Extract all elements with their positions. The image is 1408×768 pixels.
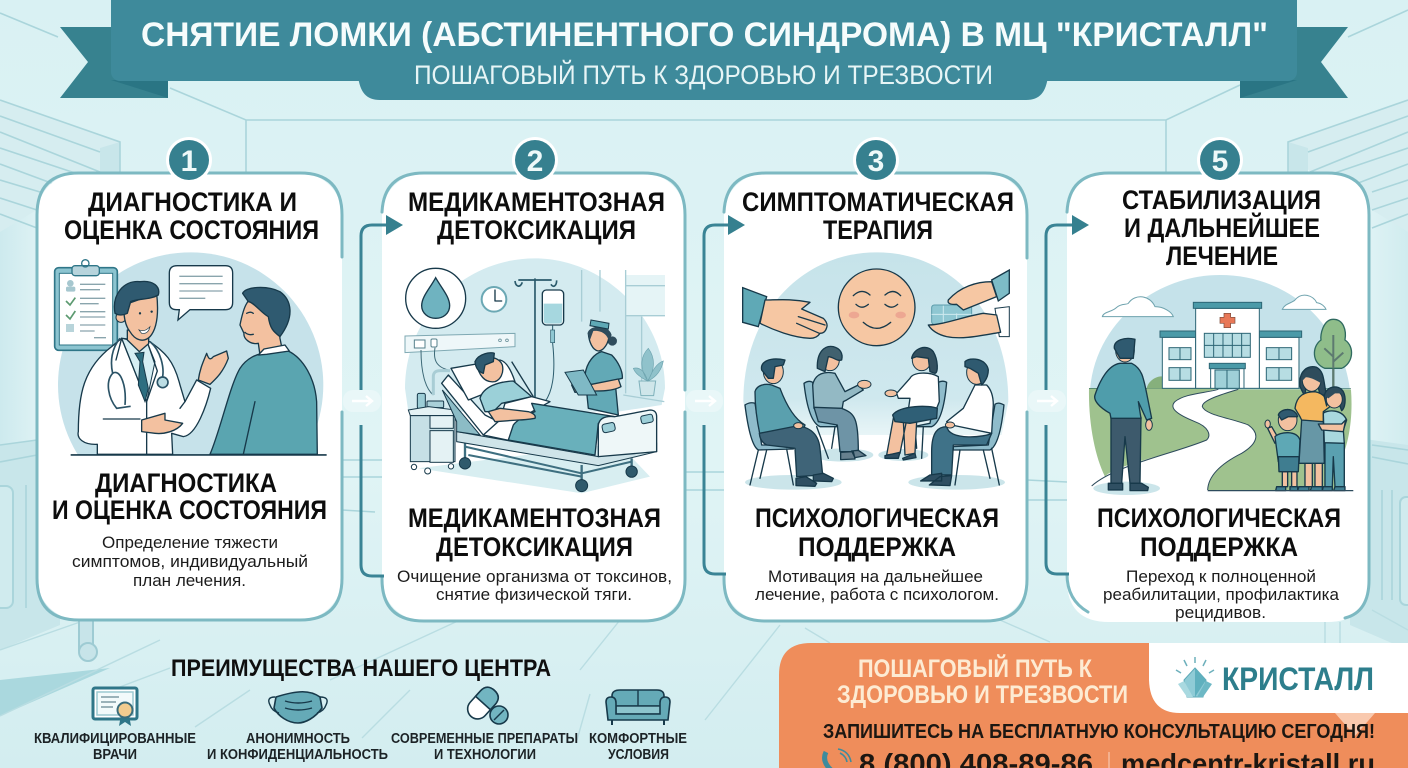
icon: crystal logo (1176, 657, 1214, 697)
IV drip (515, 278, 564, 402)
label: doctors: КВАЛИФИЦИРОВАННЫЕ (34, 731, 196, 747)
description: Очищение организма от токсинов, (397, 567, 672, 586)
icon: sofa (606, 690, 670, 725)
heading top (64, 187, 319, 245)
description: Переход к полноценной (1126, 567, 1316, 586)
label: anonymity: АНОНИМНОСТЬ (246, 731, 350, 747)
description: реабилитации, профилактика (1103, 585, 1340, 604)
CTA heading (837, 653, 1128, 709)
step number 2 (512, 137, 558, 183)
patient (210, 287, 317, 454)
label: anonymity (207, 731, 388, 763)
heading bottom (408, 503, 661, 562)
label: doctors (34, 731, 196, 763)
group person 4 (921, 359, 1004, 486)
clouds (1102, 295, 1326, 317)
illustration: hospital and family (1089, 275, 1353, 495)
family (1265, 367, 1347, 491)
group person 3 (885, 347, 947, 460)
heading bottom (1097, 503, 1341, 562)
heading top: МЕДИКАМЕНТОЗНАЯ (408, 187, 665, 217)
bedside table (408, 393, 456, 474)
label: modern drugs (391, 731, 578, 763)
water drop badge (406, 268, 466, 328)
panel: call to action (779, 643, 1408, 768)
heading bottom: МЕДИКАМЕНТОЗНАЯ (408, 503, 661, 533)
step number 1 (166, 137, 212, 183)
step number 5 (1197, 137, 1243, 183)
heading top: ТЕРАПИЯ (823, 215, 933, 245)
description (1103, 567, 1340, 622)
heading top: И ДАЛЬНЕЙШЕЕ (1124, 212, 1320, 243)
hospital bed (433, 353, 657, 492)
description: Определение тяжести (102, 533, 278, 552)
heading bottom: ПОДДЕРЖКА (1140, 532, 1298, 562)
heading top: ДИАГНОСТИКА И (88, 187, 297, 217)
description: симптомов, индивидуальный (72, 552, 308, 571)
label: comfort: УСЛОВИЯ (608, 747, 669, 763)
CTA heading: ПОШАГОВЫЙ ПУТЬ К (858, 653, 1093, 683)
contacts (859, 748, 1375, 768)
nurse (565, 320, 622, 415)
icon: medical mask (269, 692, 327, 723)
logo box (1149, 643, 1408, 713)
title text: СНЯТИЕ ЛОМКИ (АБСТИНЕНТНОГО СИНДРОМА) В МЦ "КРИСТАЛЛ" (141, 16, 1268, 54)
description: план лечения. (133, 571, 246, 590)
icon: phone (825, 749, 851, 768)
description (397, 567, 672, 604)
heading top (742, 187, 1014, 245)
banner right tail (1240, 27, 1348, 98)
heading top: ОЦЕНКА СОСТОЯНИЯ (64, 215, 319, 245)
description: лечение, работа с психологом. (755, 585, 999, 604)
clock (482, 287, 506, 312)
illustration: doctor and patient (54, 252, 327, 456)
icon: pills (464, 684, 508, 724)
description: рецидивов. (1175, 603, 1266, 622)
hospital building (1160, 302, 1302, 388)
label: modern drugs: СОВРЕМЕННЫЕ ПРЕПАРАТЫ (391, 731, 578, 747)
man looking at hospital (1093, 338, 1160, 495)
plant (633, 348, 663, 396)
banner left tail (60, 27, 168, 98)
panel: step 3 symptomatic therapy (724, 137, 1027, 621)
heading bottom: И ОЦЕНКА СОСТОЯНИЯ (52, 495, 327, 525)
label: modern drugs: И ТЕХНОЛОГИИ (434, 747, 536, 763)
step number 1: 1 (181, 145, 197, 178)
step number 3: 3 (868, 145, 884, 178)
description: Мотивация на дальнейшее (768, 567, 983, 586)
group person 2 (804, 346, 871, 460)
heading top: ЛЕЧЕНИЕ (1166, 241, 1278, 271)
heading top (408, 187, 665, 245)
heading bottom: ПСИХОЛОГИЧЕСКАЯ (1097, 503, 1341, 533)
title banner (60, 0, 1348, 100)
CTA heading: ЗДОРОВЬЮ И ТРЕЗВОСТИ (837, 681, 1128, 709)
heading top: ДЕТОКСИКАЦИЯ (437, 215, 636, 245)
icon: diploma (93, 688, 137, 726)
description: снятие физической тяги. (436, 585, 632, 604)
section: advantages (34, 655, 687, 763)
heading bottom (52, 468, 327, 525)
connector arrows between steps (343, 215, 1089, 576)
window (582, 270, 665, 402)
step number 3 (853, 137, 899, 183)
heading bottom: ДЕТОКСИКАЦИЯ (436, 532, 633, 562)
calm face (838, 269, 915, 346)
doctor (78, 281, 228, 454)
hands with medicine (928, 270, 1009, 338)
subtitle: ПОШАГОВЫЙ ПУТЬ К ЗДОРОВЬЮ И ТРЕЗВОСТИ (414, 59, 993, 90)
tree (1314, 319, 1352, 387)
step number 5: 5 (1212, 145, 1228, 178)
advantages heading: ПРЕИМУЩЕСТВА НАШЕГО ЦЕНТРА (171, 655, 551, 682)
heading top (1122, 185, 1321, 271)
heading top: СИМПТОМАТИЧЕСКАЯ (742, 187, 1014, 217)
illustration: calm face, hands and group therapy (743, 252, 1009, 490)
speech bubble (169, 266, 233, 320)
heading bottom: ПОДДЕРЖКА (798, 532, 956, 562)
label: comfort (589, 731, 687, 763)
panel: step 5 stabilisation (1067, 137, 1369, 622)
heading bottom (755, 503, 999, 562)
heading bottom: ПСИХОЛОГИЧЕСКАЯ (755, 503, 999, 533)
label: doctors: ВРАЧИ (93, 747, 137, 763)
heading bottom: ДИАГНОСТИКА (95, 468, 277, 498)
description (72, 533, 308, 590)
label: anonymity: И КОНФИДЕНЦИАЛЬНОСТЬ (207, 747, 388, 763)
description (755, 567, 999, 604)
illustration: patient in hospital bed (405, 258, 665, 493)
heading top: СТАБИЛИЗАЦИЯ (1122, 185, 1321, 215)
panel: step 2 detox (382, 137, 685, 621)
wall panel (405, 333, 515, 395)
logo text: КРИСТАЛЛ (1222, 661, 1374, 697)
clipboard (55, 260, 117, 350)
panel: step 1 diagnostics (37, 137, 342, 620)
label: comfort: КОМФОРТНЫЕ (589, 731, 687, 747)
step number 2: 2 (527, 145, 543, 178)
group person 1 (745, 359, 833, 486)
open hand (743, 288, 827, 338)
